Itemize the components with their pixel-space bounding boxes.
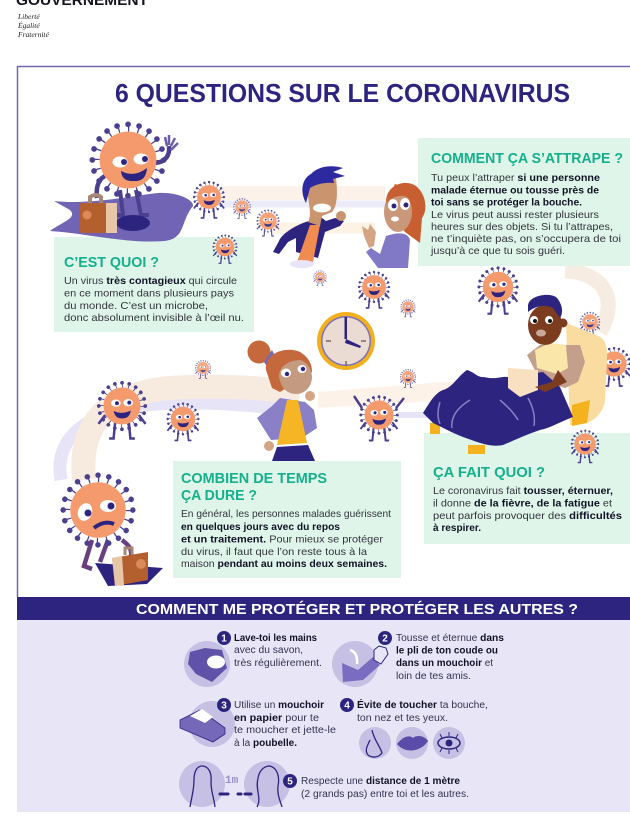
small viruses [167, 182, 630, 463]
step 1: wash hands: avec du savon, [234, 645, 303, 656]
step 2: cough in elbow: 2 [382, 634, 388, 644]
panel: ca fait quoi: il donne de la fièvre, de la fatigue et [433, 498, 612, 510]
step 4: do not touch face: Évite de toucher ta bouche, [357, 698, 488, 711]
panel: comment ca s'attrape: toi sans se protéger la bouche. [431, 196, 582, 208]
step 4: do not touch face: ton nez et tes yeux. [357, 713, 448, 724]
virus worried, left middle [98, 383, 146, 438]
header: government wordmark: Fraternité [17, 30, 49, 39]
panel: c'est quoi: donc absolument invisible à l’œil nu. [64, 312, 244, 324]
step 1: wash hands: 1 [221, 634, 227, 644]
panel: c'est quoi: en ce moment dans plusieurs pays [64, 288, 234, 300]
panel: comment ca s'attrape: jusqu’à ce que tu sois guéri. [430, 245, 565, 257]
virus with suitcase, top left [50, 124, 193, 242]
step 3: tissue box: en papier pour te [234, 713, 319, 724]
step 1: wash hands [184, 631, 322, 687]
step 3: tissue box: à la poubelle. [234, 738, 297, 749]
step 5: keep distance: 1m [225, 775, 239, 787]
step 2: cough in elbow: Tousse et éternue dans [396, 633, 504, 644]
virus with suitcase, bottom left [63, 475, 163, 586]
character: woman [362, 183, 425, 268]
step 2: cough in elbow: le pli de ton coude ou [396, 646, 498, 656]
step 5: keep distance [179, 761, 469, 807]
panel: comment ca s'attrape: ne t’inquiète pas, on s’occupera de toi [431, 233, 621, 245]
panel: comment ca s'attrape: COMMENT ÇA S’ATTRAPE ? [431, 150, 623, 167]
header: government wordmark: Liberté [17, 12, 40, 21]
panel: combien de temps: En général, les personnes malades guérissent [181, 508, 391, 520]
panel: c'est quoi [54, 237, 254, 332]
header: government wordmark: Égalité [17, 20, 40, 30]
background swooshes [60, 193, 608, 480]
panel: ca fait quoi: à respirer. [433, 522, 481, 534]
character: girl [248, 340, 317, 461]
step 3: tissue box: Utilise un mouchoir [234, 700, 324, 711]
panel: comment ca s'attrape: malade éternue ou tousse près de [431, 184, 599, 196]
panel: c'est quoi: Un virus très contagieux qui circule [64, 275, 237, 287]
header: government wordmark [16, 0, 148, 39]
panel: c'est quoi: du monde. C’est un microbe, [64, 300, 208, 312]
step 4: do not touch face: 4 [344, 700, 350, 712]
panel: combien de temps: et un traitement. Pour mieux se protéger [181, 534, 384, 546]
panel: comment ca s'attrape [418, 138, 630, 266]
title: 6 QUESTIONS SUR LE CORONAVIRUS [115, 80, 570, 108]
step 2: cough in elbow: dans un mouchoir et [396, 658, 493, 669]
step 5: keep distance: (2 grands pas) entre toi et les autres. [301, 789, 469, 800]
step 5: keep distance: Respecte une distance de 1 mètre [301, 776, 460, 787]
step 5: keep distance: 5 [287, 776, 293, 788]
panel: c'est quoi: C’EST QUOI ? [64, 254, 159, 271]
panel: combien de temps: maison pendant au moins deux semaines. [181, 558, 387, 570]
panel: ca fait quoi: Le coronavirus fait tousser, éternuer, [433, 485, 613, 497]
character: boy under blanket in armchair [423, 295, 607, 454]
step 3: tissue box [180, 698, 336, 749]
step 2: cough in elbow: loin de tes amis. [396, 671, 471, 682]
step 1: wash hands: Lave-toi les mains [234, 633, 317, 644]
panel: ca fait quoi [424, 433, 630, 544]
panel: combien de temps [173, 461, 401, 578]
step 3: tissue box: 3 [221, 700, 227, 712]
step 3: tissue box: te moucher et jette-le [234, 725, 336, 736]
panel: protection gestures [17, 620, 630, 812]
panel: comment ca s'attrape: Tu peux l’attraper si une personne [431, 172, 600, 184]
step 2: cough in elbow [332, 631, 504, 687]
band: protect heading: COMMENT ME PROTÉGER ET PROTÉGER LES AUTRES ? [136, 601, 578, 618]
panel: comment ca s'attrape: Le virus peut aussi rester plusieurs [431, 209, 599, 221]
character: man sneezing [273, 166, 346, 268]
panel: comment ca s'attrape: heures sur des objets. Si tu l’attrapes, [431, 221, 613, 233]
panel: combien de temps: COMBIEN DE TEMPS [181, 470, 327, 487]
page frame [18, 66, 630, 597]
step 4: do not touch face [340, 698, 488, 759]
panel: combien de temps: ÇA DURE ? [181, 487, 257, 504]
band: protect heading [17, 597, 630, 620]
panel: combien de temps: en quelques jours avec du repos [181, 521, 340, 533]
panel: combien de temps: du virus, il faut que l’on reste tous à la [181, 546, 367, 558]
panel: ca fait quoi: ÇA FAIT QUOI ? [433, 464, 545, 481]
panel: ca fait quoi: peut parfois provoquer des difficultés [433, 510, 622, 522]
icon: clock [317, 312, 375, 370]
step 1: wash hands: très régulièrement. [234, 658, 322, 669]
